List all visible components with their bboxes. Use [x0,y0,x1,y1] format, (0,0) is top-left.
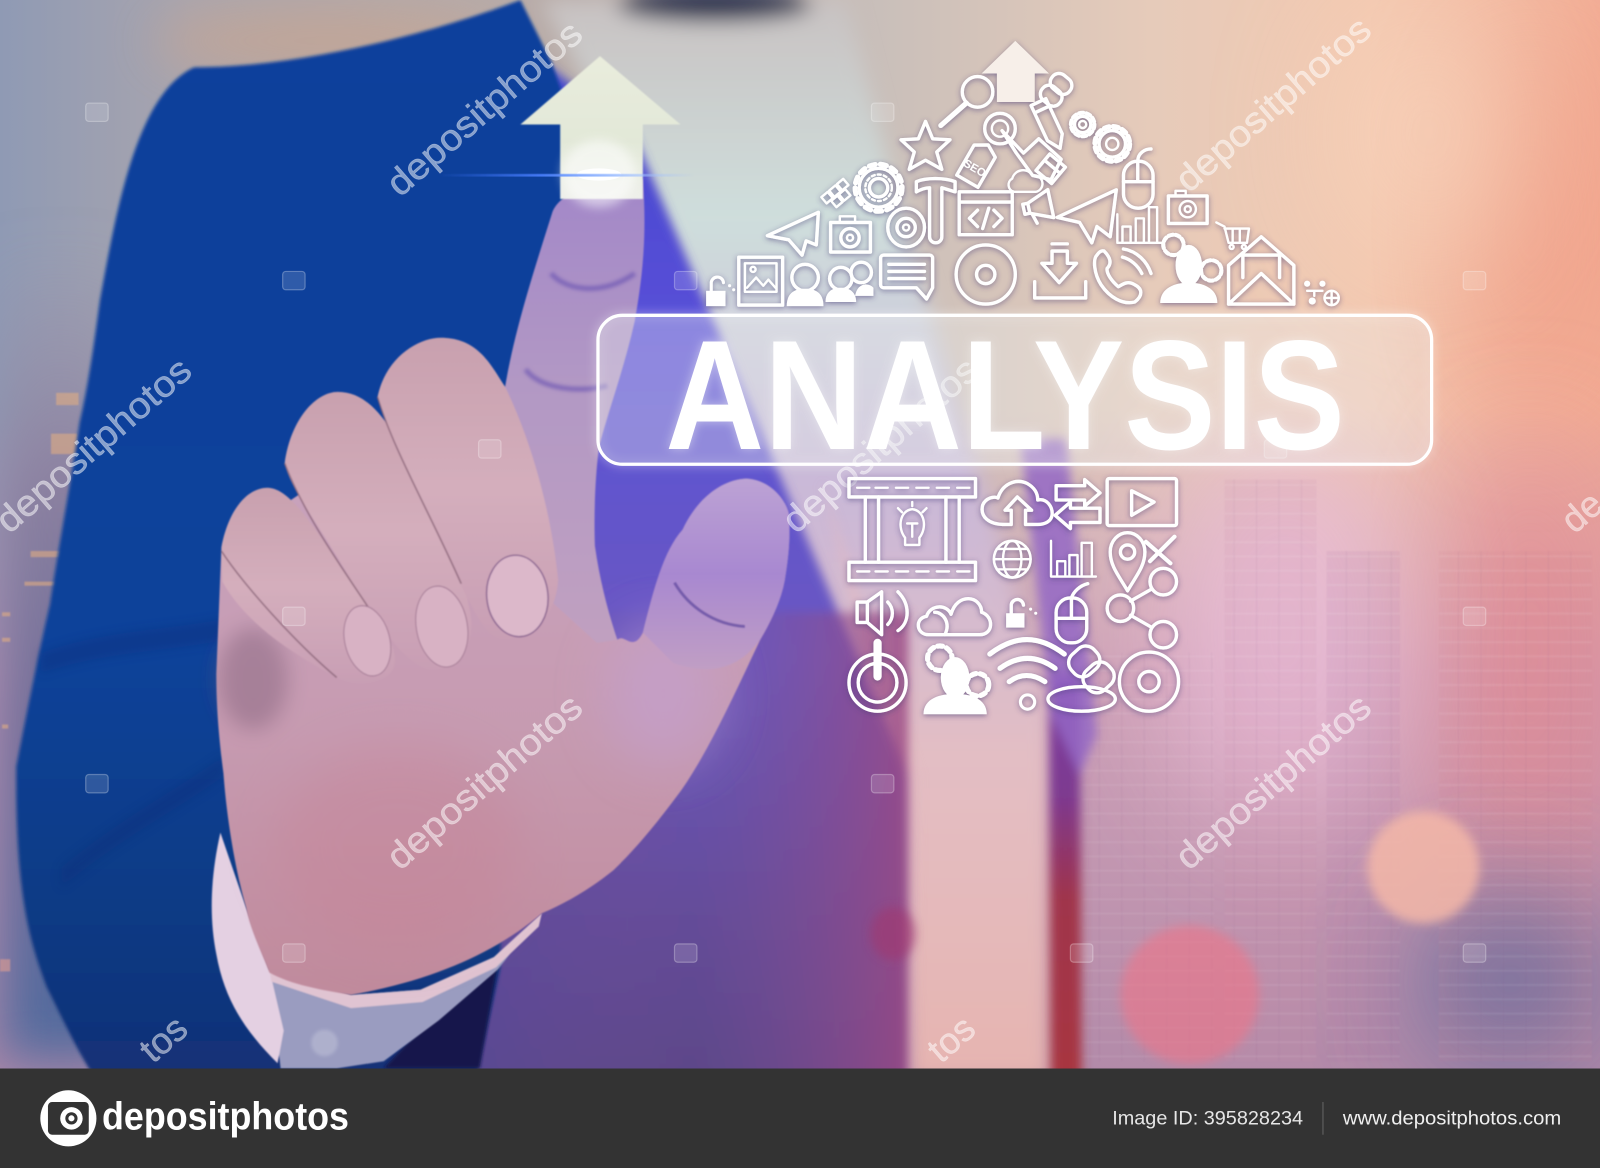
icon: location pin [1110,533,1145,591]
icon: speaker [857,592,907,635]
icon: person back [851,262,873,296]
icon: hand pointer [1002,131,1061,180]
watermarks: depositphotos [1167,8,1379,200]
icon: swap arrows [1055,480,1100,529]
icon: megaphone [1021,190,1054,225]
icon: link on plate [1048,641,1119,711]
icon: SEO tag: SEO [961,158,988,180]
watermarks: depositphotos [1167,686,1379,877]
icon: envelope [1229,237,1294,304]
icon: chat bubble [881,255,933,299]
icon: power button [849,643,906,711]
icon: camera left [831,216,870,252]
icon: unlocked padlock [706,277,735,306]
footer bar [0,1068,1600,1168]
icon: user gears lower [923,646,989,714]
icon: chain link [1037,70,1075,110]
icon: user with gears [1160,235,1221,303]
title: ANALYSIS [665,309,1345,483]
icon: code window [959,192,1012,235]
palm warm tone [276,745,520,949]
rounded title box with ANALYSIS [598,309,1432,483]
icon: small disc [888,208,924,247]
watermarks: tos [131,1007,195,1070]
website url: www.depositphotos.com [1342,1107,1561,1129]
icon: computer mouse [1123,149,1153,208]
fingernails [337,601,398,681]
icon: cloud upload [982,481,1052,524]
icon: hammer [916,179,955,243]
icon: globe [994,541,1031,578]
watermark camera marks [86,103,1486,962]
icon: person front [826,267,856,302]
icon: star [901,121,950,169]
icon: network people [1304,281,1339,305]
icon: SEO tag [957,139,999,187]
icon: share nodes [1107,568,1177,648]
lower icon block [849,479,1179,714]
icon: picture frame [739,257,783,305]
icon: wifi [990,640,1064,709]
icon: double cloud [918,599,991,635]
icon: unlocked padlock small [1006,599,1037,628]
icon: phone [1095,249,1151,303]
tie and right jacket edge [821,439,1097,1082]
icon: magnifier [941,77,993,126]
jacket lapel [429,20,908,1082]
icon: right paper plane [1057,190,1116,243]
blue jacket [16,0,602,1082]
index knuckle creases [526,273,635,389]
icon: headset person [787,264,823,306]
watermarks: depositphotos [378,686,590,877]
icon: click target [985,113,1015,144]
dark sleeve behind cuff [384,964,498,1068]
icon: shopping cart [1216,222,1249,249]
icon: pencil [1031,99,1067,152]
watermarks: depositphotos [774,349,986,541]
index finger [505,178,644,643]
icon: signal bars [1051,541,1096,577]
shirt cuff [212,833,542,1068]
logo wordmark: depositphotos [102,1096,349,1139]
icon: small cloud [1009,170,1042,192]
curled little finger [221,488,395,683]
icon: wrench and screwdriver [1146,537,1174,563]
icon: play window [1107,479,1177,526]
icon: disc centre [956,245,1015,304]
watermarks: tos [919,1007,983,1070]
icon: dotted blocks [821,179,854,210]
icon: small gear [1071,113,1094,136]
palm shadow under fingers [218,628,288,730]
city lights left [0,393,79,971]
icon: top arrow [982,41,1049,102]
bokeh lights [1120,811,1480,1064]
city skyline right [1082,480,1592,1061]
icon: large gear [1095,127,1130,161]
shirt button [870,907,915,960]
icon: film strip with light bulb [849,479,976,581]
curled index knuckle [378,338,558,639]
icon: download tray [1035,244,1086,298]
shirt [541,0,1051,1082]
hand palm and thumb [216,479,789,995]
logo mark [40,1090,96,1146]
finger creases [221,397,461,678]
watermarks: depositphotos [378,12,590,204]
large arrow above finger [439,56,694,207]
icon: bar chart [1117,207,1162,243]
image id: Image ID: 395828234 [1112,1107,1303,1129]
icon: disc lower [1119,652,1179,711]
icon: camera right [1168,191,1207,223]
curled middle finger [285,392,471,670]
icon: mouse lower [1056,584,1088,643]
icon: left paper plane [767,212,818,255]
icon: plug [1036,154,1065,184]
icon: settings gear [855,164,902,211]
thumb crease [674,583,745,627]
thumb tip [643,479,789,669]
hand [216,178,789,995]
icon pyramid [706,41,1339,306]
